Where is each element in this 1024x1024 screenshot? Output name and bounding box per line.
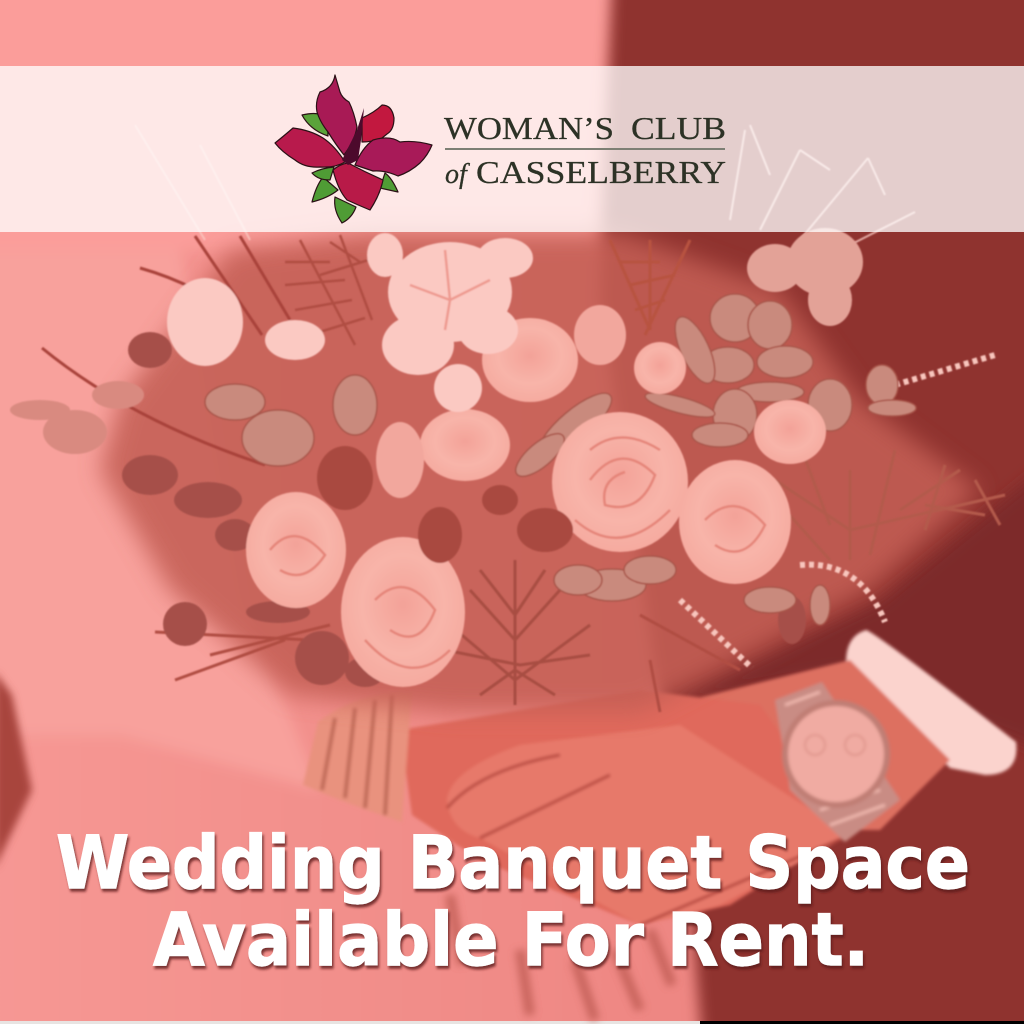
headline xyxy=(56,821,970,983)
dark gap beside the dress xyxy=(0,672,32,868)
bottom petal xyxy=(333,163,383,210)
bouquet xyxy=(10,125,1005,712)
logo: club name: CLUB xyxy=(631,110,726,146)
light central petals xyxy=(376,305,626,498)
flower throat xyxy=(342,108,364,165)
shirt cuff xyxy=(846,630,1016,775)
fern: bottom xyxy=(445,560,590,705)
dark eucalyptus leaves xyxy=(122,332,806,687)
pale flower sprays rising into the band xyxy=(135,125,915,245)
left petal xyxy=(275,128,345,167)
rose petal folds xyxy=(270,438,765,668)
logo: club name xyxy=(444,110,726,190)
logo: club name: WOMAN’S xyxy=(444,110,614,146)
strip at the bottom edge xyxy=(0,1021,700,1024)
twigs and stems xyxy=(42,236,290,465)
bangles xyxy=(303,692,412,822)
top petal xyxy=(316,75,357,155)
upper right petal xyxy=(362,105,394,142)
wrist xyxy=(690,660,950,830)
watch xyxy=(775,682,900,842)
fern: right xyxy=(760,445,1005,560)
central dark accents xyxy=(317,446,573,563)
sage eucalyptus leaves xyxy=(205,294,916,625)
right petal xyxy=(355,138,432,176)
clasped hand xyxy=(447,725,850,925)
hands and jewellery xyxy=(303,630,1016,925)
headline: Available For Rent. xyxy=(153,898,869,983)
logo: club name: of xyxy=(445,159,470,190)
pale hydrangea blossoms xyxy=(167,233,533,412)
lower hand xyxy=(400,690,850,925)
faded leaves far left xyxy=(10,381,144,454)
logo: club name: CASSELBERRY xyxy=(476,154,726,190)
sprig: upper centre xyxy=(610,240,690,335)
ribbons below hands xyxy=(450,895,672,1020)
logo band xyxy=(0,66,1024,232)
logo: hibiscus flower xyxy=(275,75,432,223)
pale berried sprays xyxy=(680,355,995,668)
fern: upper left xyxy=(285,235,375,345)
dark foliage backdrop xyxy=(100,232,980,712)
small twigs lower left and right xyxy=(155,615,740,712)
roses xyxy=(246,318,826,687)
blossom over the top right xyxy=(747,228,863,326)
leaves xyxy=(302,114,328,136)
